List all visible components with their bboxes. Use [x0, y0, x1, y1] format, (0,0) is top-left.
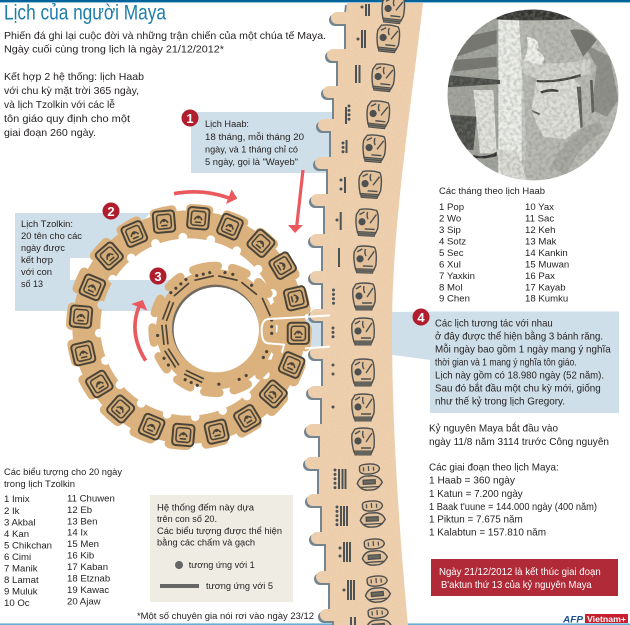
- badge 3: [150, 268, 166, 284]
- Haab months list: 12 Keh: [525, 225, 555, 236]
- callout 4: interacting calendars: thời gian và 1 mang ý nghĩa tôn giáo.: [435, 356, 577, 368]
- callout 4: interacting calendars: [412, 308, 611, 408]
- callout 2: Tzolkin: 2: [107, 204, 115, 219]
- callout 1: Haab: 5 ngày, gọi là "Wayeb": [205, 157, 298, 168]
- Haab months list: 18 Kumku: [525, 294, 568, 305]
- Tzolkin day symbols list: 9 Muluk: [4, 586, 38, 598]
- arrow: inner gear rotation: [131, 300, 147, 361]
- panel: interaction blue background: [300, 312, 619, 413]
- Tzolkin day symbols list: 13 Ben: [67, 516, 97, 528]
- callout 4: interacting calendars: như thế kỷ trong lịch Gregory.: [435, 396, 565, 408]
- callout 4: interacting calendars: Sau đó bắt đầu một chu kỳ mới, giống: [435, 382, 601, 394]
- Tzolkin outer gear: [69, 207, 309, 447]
- Tzolkin day symbols list: 7 Manik: [4, 564, 38, 575]
- red callout: end of B'aktun: B'aktun thứ 13 của kỷ nguyên Maya: [441, 579, 592, 591]
- Tzolkin day symbols list: Các biểu tượng cho 20 ngày: [4, 467, 122, 478]
- Haab months list: 3 Sip: [439, 225, 461, 236]
- Tzolkin day symbols list: 4 Kan: [4, 529, 29, 540]
- Haab months list: 4 Sotz: [439, 236, 466, 247]
- callout 2: Tzolkin: ngày được: [21, 243, 65, 254]
- footnote: *Một số chuyên gia nói rơi vào ngày 23/12: [137, 611, 314, 622]
- badge 3: 3: [154, 269, 162, 284]
- callout 4: interacting calendars: Các lịch tương tác với nhau: [435, 318, 553, 330]
- title: Lịch của người Maya: [4, 2, 166, 24]
- Haab months list: 7 Yaxkin: [439, 271, 475, 282]
- Tzolkin day symbols list: 20 Ajaw: [67, 596, 101, 608]
- panel: counting system legend: tương ứng với 1: [189, 560, 255, 571]
- credits: AFP and Vietnam+: Vietnam+: [587, 614, 626, 624]
- Maya era text: Kỷ nguyên Maya bắt đầu vào: [429, 422, 558, 435]
- Maya periods list: 1 Katun = 7.200 ngày: [429, 488, 523, 500]
- description text: với chu kỳ mặt trời 365 ngày,: [4, 85, 139, 97]
- Tzolkin day symbols list: 12 Eb: [67, 505, 92, 516]
- panel: Haab blue background: [191, 112, 336, 173]
- Tzolkin day symbols list: 17 Kaban: [67, 562, 108, 573]
- callout 1: Haab: [182, 110, 304, 168]
- panel: counting system legend: bằng các chấm và gạch: [157, 538, 255, 549]
- intro text: [4, 30, 326, 56]
- Maya era text: ngày 11/8 năm 3114 trước Công nguyên: [429, 436, 609, 448]
- Maya periods list: 1 Kalabtun = 157.810 năm: [429, 527, 546, 539]
- red callout: end of B'aktun: [431, 559, 618, 596]
- callout 4: interacting calendars: 4: [417, 310, 425, 325]
- Haab months list: 6 Xul: [439, 259, 461, 270]
- bottom rule: [0, 623, 630, 625]
- panel: counting system legend: Các biểu tượng được thể hiện: [157, 526, 282, 537]
- callout 1: Haab: ngày, và 1 tháng chỉ có: [205, 144, 298, 156]
- Tzolkin day symbols list: 6 Cimi: [4, 552, 31, 563]
- Maya periods list: Các giai đoạn theo lịch Maya:: [429, 462, 559, 474]
- Tzolkin day symbols list: 11 Chuwen: [67, 494, 115, 505]
- Tzolkin day symbols list: 15 Men: [67, 539, 99, 550]
- Tzolkin day symbols list: 10 Oc: [4, 598, 30, 609]
- vertical calendar strip: [303, 3, 423, 625]
- Haab months list: 1 Pop: [439, 202, 464, 213]
- callout 4: interacting calendars: ở đây được thể hiện bằng 3 bánh răng.: [435, 330, 603, 343]
- Haab months list: 11 Sac: [525, 214, 554, 225]
- callout 2: Tzolkin: số 13: [21, 279, 43, 290]
- Haab months list: 13 Mak: [525, 236, 557, 247]
- description text: [4, 71, 144, 139]
- intro text: Ngày cuối cùng trong lịch là ngày 21/12/2012*: [4, 44, 224, 56]
- Haab months list: 5 Sec: [439, 248, 464, 259]
- Tzolkin day symbols list: 2 Ik: [4, 506, 20, 517]
- Tzolkin day symbols list: 19 Kawac: [67, 585, 109, 596]
- Maya periods list: [429, 462, 597, 539]
- Tzolkin day symbols list: 14 Ix: [67, 528, 88, 538]
- red callout: end of B'aktun: Ngày 21/12/2012 là kết thúc giai đoạn: [439, 566, 601, 578]
- Tzolkin day symbols list: [4, 467, 122, 609]
- Haab months list: Các tháng theo lịch Haab: [439, 186, 545, 197]
- arrow: Haab direction: [288, 170, 303, 233]
- callout 4: interacting calendars: Lịch này gồm có 18.980 ngày (52 năm).: [435, 370, 604, 382]
- Haab months list: 2 Wo: [439, 214, 461, 225]
- panel: counting system legend: tương ứng với 5: [206, 581, 273, 592]
- Haab months list: [439, 186, 569, 305]
- Tzolkin day symbols list: 5 Chikchan: [4, 541, 52, 552]
- arrow: outer gear rotation: [174, 189, 237, 204]
- Haab months list: 9 Chen: [439, 294, 470, 305]
- description text: và lịch Tzolkin với các lễ: [4, 98, 115, 111]
- Maya periods list: 1 Haab = 360 ngày: [429, 475, 516, 487]
- Haab months list: 14 Kankin: [525, 248, 568, 259]
- panel: counting system legend: [150, 495, 293, 602]
- Tzolkin day symbols list: 1 Imix: [4, 494, 30, 505]
- Tzolkin day symbols list: 18 Etznab: [67, 574, 110, 585]
- number inner gear: [141, 254, 291, 404]
- Maya periods list: 1 Baak t'uune = 144.000 ngày (400 năm): [429, 501, 597, 513]
- description text: tôn giáo quy định cho một: [4, 113, 130, 125]
- Haab months list: 8 Mol: [439, 282, 462, 293]
- Tzolkin day symbols list: trong lịch Tzolkin: [4, 479, 75, 490]
- strip number marks: [333, 4, 369, 625]
- top rule: [0, 0, 630, 2]
- description text: giai đoạn 260 ngày.: [4, 127, 96, 139]
- callout 4: interacting calendars: Mỗi ngày bao gồm 1 ngày mang ý nghĩa: [435, 342, 611, 356]
- Haab months list: 17 Kayab: [525, 282, 566, 293]
- panel: Tzolkin blue background: [15, 213, 176, 311]
- callout 2: Tzolkin: kết hợp: [21, 255, 53, 266]
- credits: AFP and Vietnam+: [562, 614, 628, 625]
- callout 1: Haab: Lịch Haab:: [205, 119, 249, 130]
- Maya era text: [429, 422, 609, 448]
- callout 2: Tzolkin: [21, 202, 120, 290]
- panel: counting system legend: trên con số 20.: [157, 514, 217, 525]
- Haab months list: 10 Yax: [525, 202, 554, 213]
- intro text: Phiến đá ghi lại cuộc đời và những trận chiến của một chúa tế Maya.: [4, 30, 326, 42]
- strip day glyphs: [352, 0, 406, 625]
- Tzolkin day symbols list: 8 Lamat: [4, 575, 39, 586]
- Haab months list: 16 Pax: [525, 271, 555, 282]
- callout 1: Haab: 1: [186, 111, 194, 126]
- callout 2: Tzolkin: với con: [21, 267, 52, 278]
- callout 2: Tzolkin: 20 tên cho các: [21, 231, 82, 242]
- callout 1: Haab: 18 tháng, mỗi tháng 20: [205, 132, 304, 143]
- Haab months list: 15 Muwan: [525, 259, 569, 270]
- photo: Maya stone carving: [447, 8, 620, 182]
- panel: counting system legend: Hệ thống đếm này dựa: [157, 503, 255, 514]
- Tzolkin day symbols list: 16 Kib: [67, 550, 94, 562]
- Maya periods list: 1 Piktun = 7.675 năm: [429, 514, 523, 526]
- highlighted day outline: [262, 315, 330, 353]
- Tzolkin day symbols list: 3 Akbal: [4, 518, 35, 528]
- description text: Kết hợp 2 hệ thống: lịch Haab: [4, 71, 144, 83]
- callout 2: Tzolkin: Lịch Tzolkin:: [21, 219, 73, 230]
- gear wheels: [69, 189, 330, 447]
